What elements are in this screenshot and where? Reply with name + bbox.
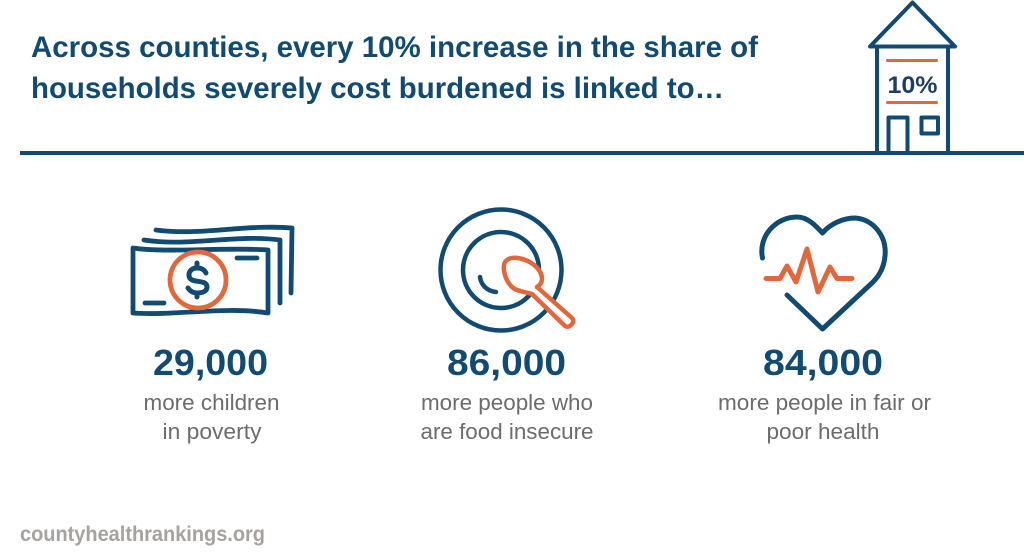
icon: stack of money [133,227,292,314]
stat: food insecure: more people who [421,390,593,415]
stat: children in poverty [144,342,280,444]
stat: fair or poor health: poor health [766,419,880,444]
stat: children in poverty: 29,000 [153,342,268,383]
icon: house with 10% [870,2,955,153]
stat: fair or poor health: 84,000 [763,342,883,383]
stat: food insecure [420,342,594,444]
stat: children in poverty: more children [144,390,280,415]
title: households severely cost burdened is linked to… [31,72,724,105]
icon: plate and spoon [440,210,573,330]
icon: heart with pulse [762,217,885,329]
stat: fair or poor health [718,342,931,444]
stat: fair or poor health: more people in fair or [718,390,931,415]
title [31,31,759,105]
baseline rule [20,151,1024,155]
dollar sign [188,263,207,297]
title: Across counties, every 10% increase in the share of [31,31,759,64]
source url: countyhealthrankings.org [20,523,265,546]
stat: food insecure: 86,000 [447,342,566,383]
icon: house with 10%: 10% [888,72,938,99]
stat: food insecure: are food insecure [420,419,594,444]
stat: children in poverty: in poverty [162,419,262,444]
